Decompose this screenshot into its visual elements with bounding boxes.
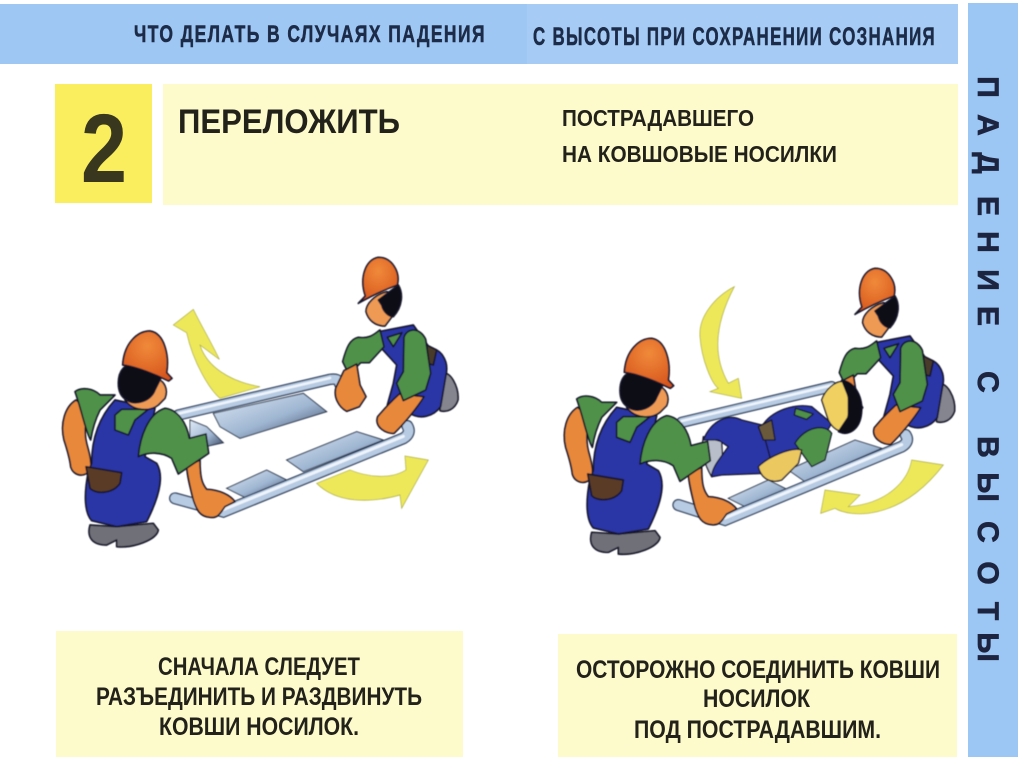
stretcher — [175, 378, 409, 512]
vertical heading: Е — [971, 306, 1004, 326]
caption: right — [558, 634, 957, 757]
arrow: lower part moves away — [317, 456, 428, 508]
header text: left part: ЧТО ДЕЛАТЬ В СЛУЧАЯХ ПАДЕНИЯ — [134, 21, 486, 48]
side column: fall from height — [968, 3, 1018, 757]
arrow: upper part moves in — [700, 287, 742, 398]
caption: right: НОСИЛОК — [703, 685, 811, 713]
vertical heading: П — [971, 76, 1004, 98]
vertical heading: Н — [971, 231, 1004, 253]
vertical heading: В — [971, 436, 1004, 458]
arrow: lower part moves in — [821, 460, 943, 514]
title description: ПОСТРАДАВШЕГО — [562, 105, 754, 131]
caption: right: ПОД ПОСТРАДАВШИМ. — [634, 716, 881, 744]
vertical heading: С — [971, 521, 1004, 543]
caption: left — [56, 631, 463, 757]
worker right — [335, 257, 458, 433]
vertical heading — [971, 76, 1004, 662]
title description: НА КОВШОВЫЕ НОСИЛКИ — [562, 141, 837, 167]
worker left — [564, 338, 737, 554]
vertical heading: О — [971, 561, 1004, 585]
caption: left: СНАЧАЛА СЛЕДУЕТ — [158, 653, 360, 681]
vertical heading: Т — [971, 602, 1004, 620]
step number box — [55, 84, 152, 203]
caption: left: РАЗЪЕДИНИТЬ И РАЗДВИНУТЬ — [96, 683, 422, 711]
vertical heading: Д — [971, 152, 1004, 174]
illustration: joining the scoops under the casualty — [564, 268, 955, 554]
vertical heading: Ы — [971, 632, 1004, 662]
step number box: 2 — [81, 94, 127, 203]
arrow: upper part moves away — [173, 309, 260, 398]
caption: left: КОВШИ НОСИЛОК. — [159, 713, 359, 741]
illustration: separating the scoop stretcher — [63, 257, 458, 547]
header band — [0, 4, 958, 64]
worker right — [832, 268, 955, 444]
vertical heading: Е — [971, 196, 1004, 216]
worker left — [63, 331, 235, 547]
step title panel — [163, 84, 958, 205]
vertical heading: А — [971, 114, 1004, 136]
vertical heading: Ы — [971, 472, 1004, 502]
caption: right: ОСТОРОЖНО СОЕДИНИТЬ КОВШИ — [576, 656, 940, 684]
vertical heading: С — [971, 371, 1004, 393]
title description — [562, 105, 837, 167]
casualty — [703, 380, 862, 481]
vertical heading: И — [971, 269, 1004, 291]
title word: ПЕРЕЛОЖИТЬ — [178, 103, 400, 141]
stretcher — [678, 385, 907, 520]
